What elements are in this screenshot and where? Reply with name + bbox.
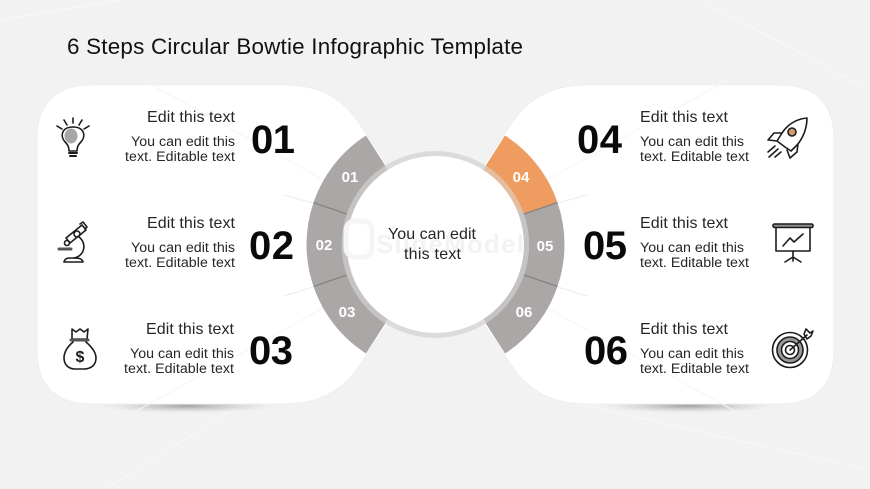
panel: left — [37, 85, 388, 404]
step 06 text — [640, 321, 749, 377]
step 01 text: You can edit this — [131, 134, 235, 150]
number 02: 02 — [249, 224, 294, 268]
step 02 text — [125, 215, 236, 271]
icon: target — [772, 329, 813, 368]
panel: right — [483, 85, 834, 404]
segment labels: 06 — [516, 304, 532, 321]
shadow: right panel — [600, 399, 776, 413]
segment: 04 highlighted — [485, 136, 558, 214]
step 03 text: You can edit this — [130, 346, 234, 362]
segment: 01 — [314, 136, 386, 214]
center ring — [344, 154, 526, 336]
step 06 text: Edit this text — [640, 321, 729, 338]
step 02 text: You can edit this — [131, 240, 235, 256]
step 05 text: Edit this text — [640, 215, 729, 232]
step 01 text: text. Editable text — [125, 149, 235, 165]
segment: 05 — [522, 203, 564, 286]
step 06 text: text. Editable text — [640, 361, 749, 377]
shadow: left panel — [99, 399, 275, 413]
icon: microscope — [59, 222, 87, 262]
icon: light bulb — [57, 118, 89, 156]
watermark — [346, 221, 524, 259]
step 05 text: You can edit this — [640, 240, 744, 256]
step 04 text: Edit this text — [640, 109, 729, 126]
step 04 text: text. Editable text — [640, 149, 749, 165]
number 05: 05 — [583, 224, 627, 268]
segment labels: 02 — [316, 237, 332, 254]
segment: 06 — [485, 274, 558, 354]
icon: money bag: $ — [76, 349, 85, 366]
step 06 text: You can edit this — [640, 346, 744, 362]
number 06: 06 — [584, 329, 628, 373]
step 05 text — [640, 215, 749, 271]
segment labels: 05 — [537, 238, 553, 255]
step 02 text: text. Editable text — [125, 255, 235, 271]
icon: rocket — [768, 118, 807, 158]
step 02 text: Edit this text — [147, 215, 236, 232]
step 01 text — [125, 109, 236, 165]
number 04: 04 — [577, 118, 623, 162]
center text: You can edit — [388, 226, 477, 243]
title: 6 Steps Circular Bowtie Infographic Template — [67, 34, 523, 59]
segment labels: 03 — [339, 304, 355, 321]
step 03 text: Edit this text — [146, 321, 235, 338]
segment: 02 — [307, 203, 348, 286]
step 04 text — [640, 109, 749, 165]
icon: money bag — [64, 329, 96, 369]
number 01: 01 — [251, 118, 295, 162]
step 05 text: text. Editable text — [640, 255, 749, 271]
step 01 text: Edit this text — [147, 109, 236, 126]
icon: presentation board — [773, 224, 813, 262]
step 03 text — [124, 321, 235, 377]
number 03: 03 — [249, 329, 293, 373]
segment labels — [316, 169, 553, 321]
segment labels: 04 — [513, 169, 530, 186]
step 03 text: text. Editable text — [124, 361, 234, 377]
segment: 03 — [314, 274, 386, 354]
watermark: SlideModel — [376, 229, 524, 259]
center text — [388, 226, 477, 263]
center text: this text — [404, 246, 462, 263]
segment labels: 01 — [342, 169, 358, 186]
step 04 text: You can edit this — [640, 134, 744, 150]
